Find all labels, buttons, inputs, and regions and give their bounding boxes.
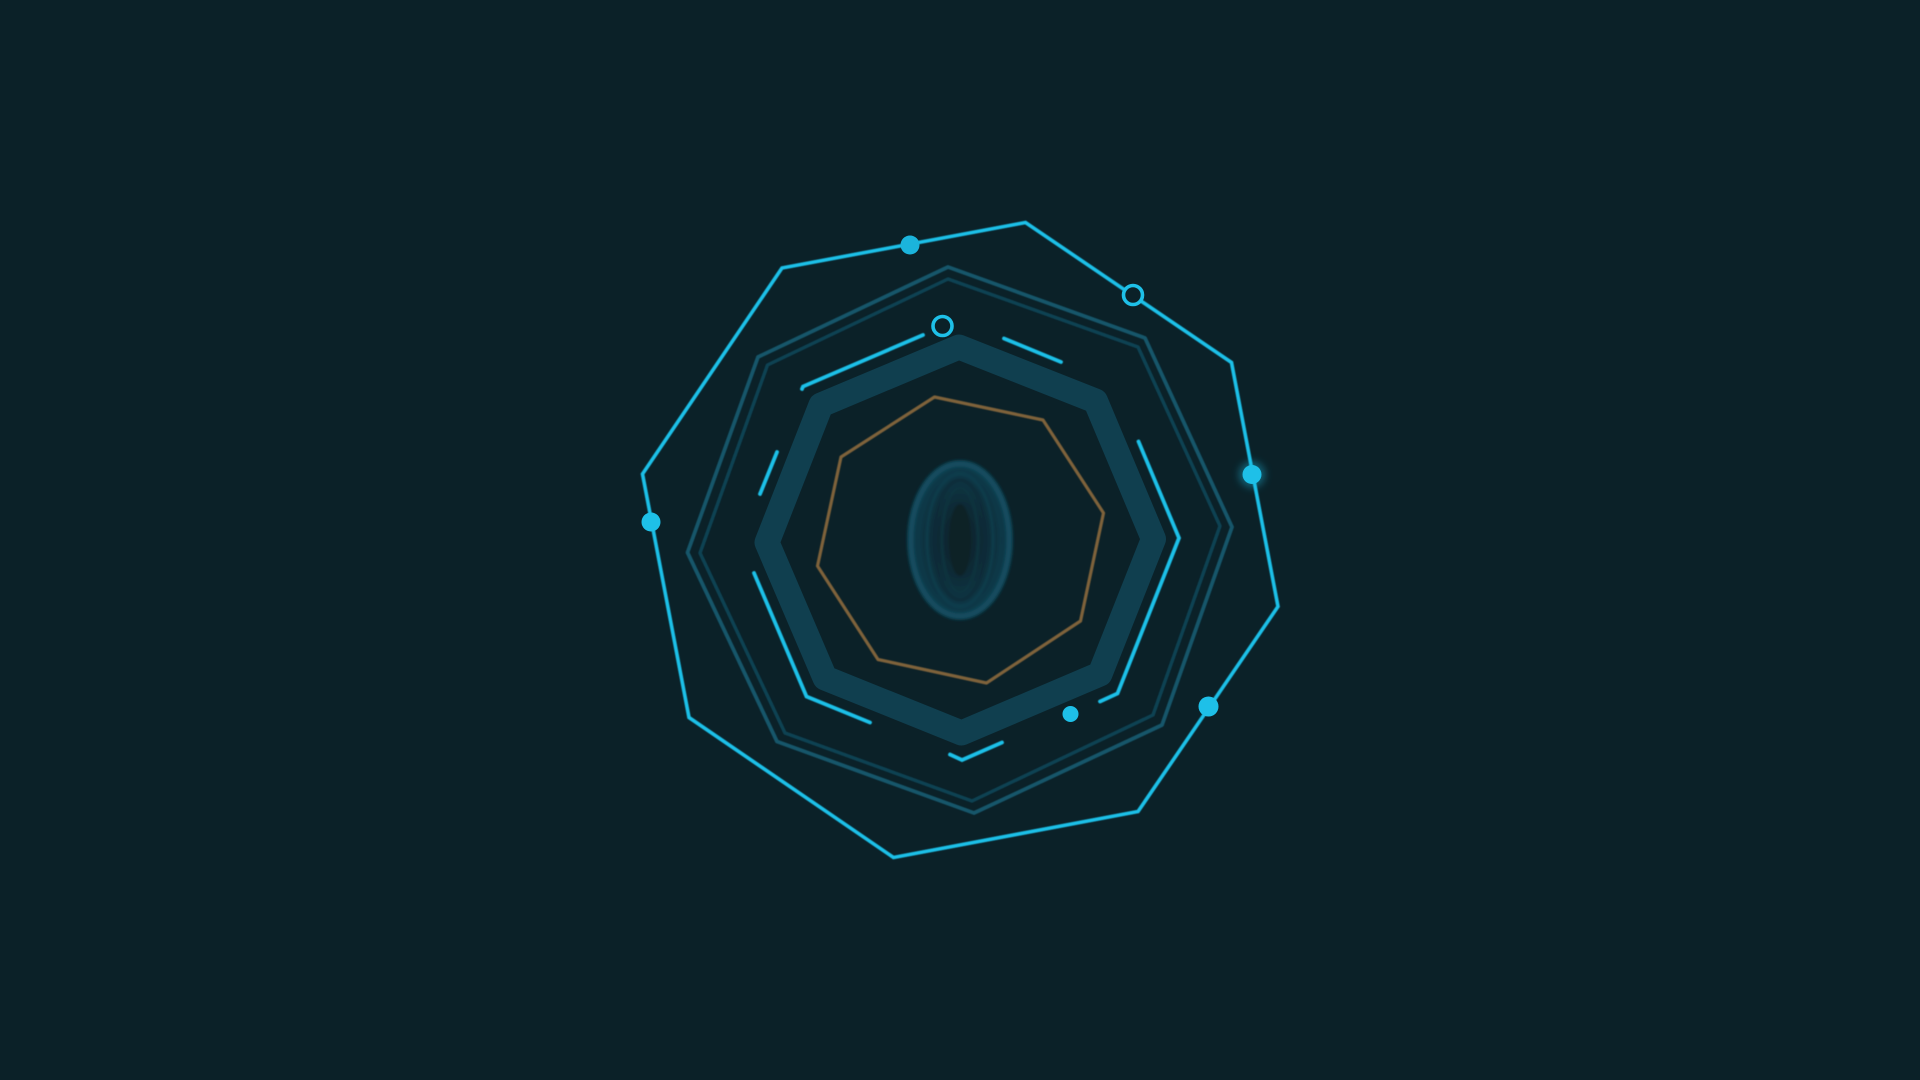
- dashed cyan octagon segments: [754, 335, 1179, 760]
- middle octagon double ring: [688, 267, 1232, 813]
- dot: right glowing node: [1239, 462, 1265, 488]
- outer cyan octagon: [642, 222, 1278, 858]
- dot: inner lower right node: [1062, 706, 1078, 722]
- segment: right: [1100, 442, 1179, 702]
- central oval ripple: [907, 460, 1013, 620]
- dot: lower right node: [1198, 696, 1218, 716]
- dot: upper right ring node: [1124, 286, 1142, 304]
- segment: bottom left: [754, 573, 870, 722]
- dot: left node: [642, 512, 660, 532]
- ring: inner faint octagon: [700, 279, 1220, 801]
- ring: outer faint octagon: [688, 267, 1232, 813]
- thick teal octagon ring: [767, 347, 1154, 733]
- segment: top left: [802, 335, 923, 389]
- segment: bottom: [950, 742, 1002, 760]
- brown inner octagon: [818, 397, 1104, 683]
- segment: left: [760, 452, 777, 494]
- segment: top right: [1004, 338, 1061, 362]
- dot: top filled node: [900, 236, 920, 254]
- dot: inner top ring node: [933, 316, 952, 336]
